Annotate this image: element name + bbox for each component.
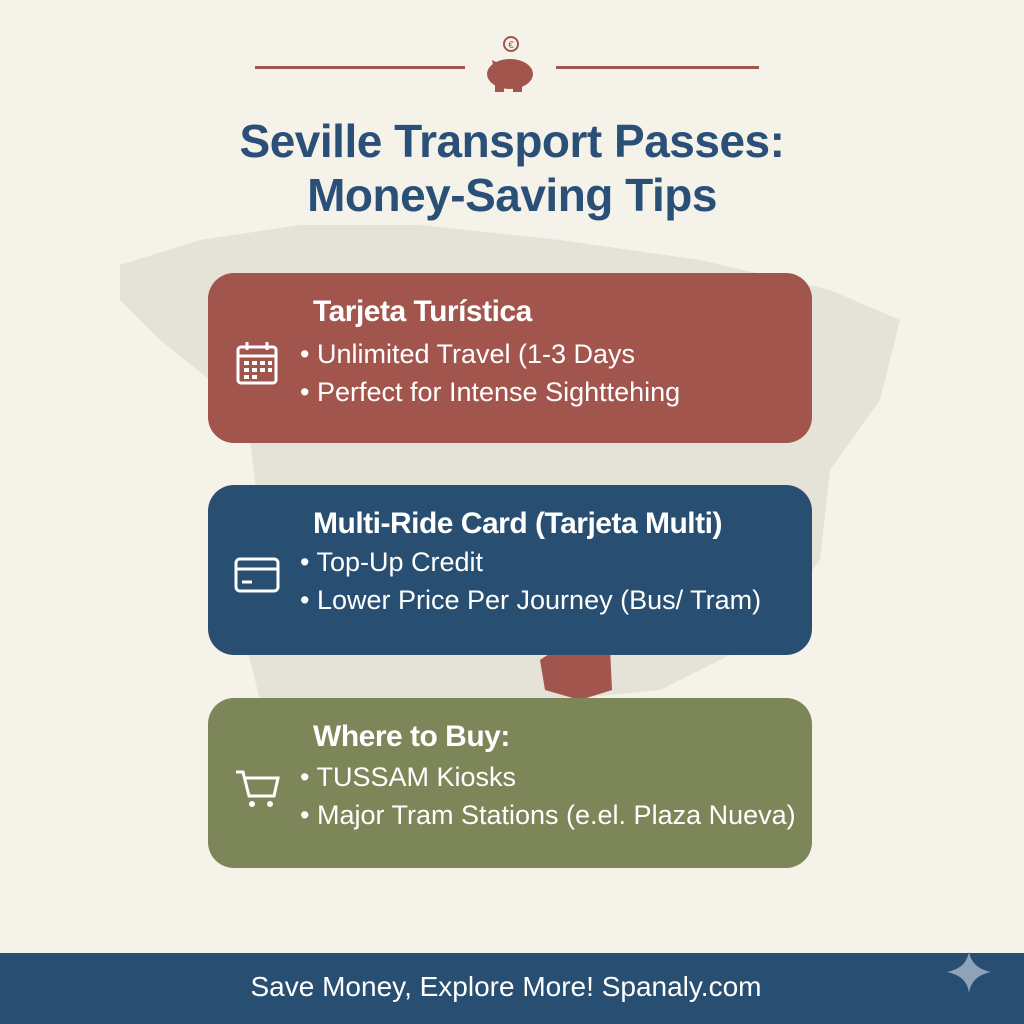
panel: Tarjeta Turistica: Tarjeta Turística (313, 295, 532, 328)
title (240, 115, 784, 221)
icon: calendar (236, 342, 278, 384)
title: Seville Transport Passes: (240, 115, 784, 167)
icon: shopping cart (236, 770, 280, 807)
panel: Multi-Ride Card: • Lower Price Per Journey (Bus/ Tram) (300, 585, 761, 615)
footer text: Save Money, Explore More! Spanaly.com (250, 971, 761, 1002)
panel: Where to Buy: • TUSSAM Kiosks (300, 762, 516, 792)
footer banner (0, 953, 1024, 1024)
panel: Tarjeta Turistica: • Unlimited Travel (1-3 Days (300, 339, 635, 369)
panel: Where to Buy (208, 698, 812, 868)
title: Money-Saving Tips (307, 169, 717, 221)
icon: credit card (234, 558, 280, 592)
panel: Where to Buy: Where to Buy: (313, 720, 510, 753)
panel: Tarjeta Turistica (208, 273, 812, 443)
header divider with piggy bank icon (255, 36, 759, 92)
icon: piggy bank: € (508, 40, 514, 51)
icon: sparkle (947, 951, 991, 993)
icon: piggy bank (487, 36, 533, 92)
panel: Where to Buy: • Major Tram Stations (e.el. Plaza Nueva) (300, 800, 796, 830)
panel: Multi-Ride Card: Multi-Ride Card (Tarjeta Multi) (313, 507, 722, 540)
panel: Multi-Ride Card (208, 485, 812, 655)
panel: Multi-Ride Card: • Top-Up Credit (300, 547, 483, 577)
panel: Tarjeta Turistica: • Perfect for Intense Sighttehing (300, 377, 680, 407)
